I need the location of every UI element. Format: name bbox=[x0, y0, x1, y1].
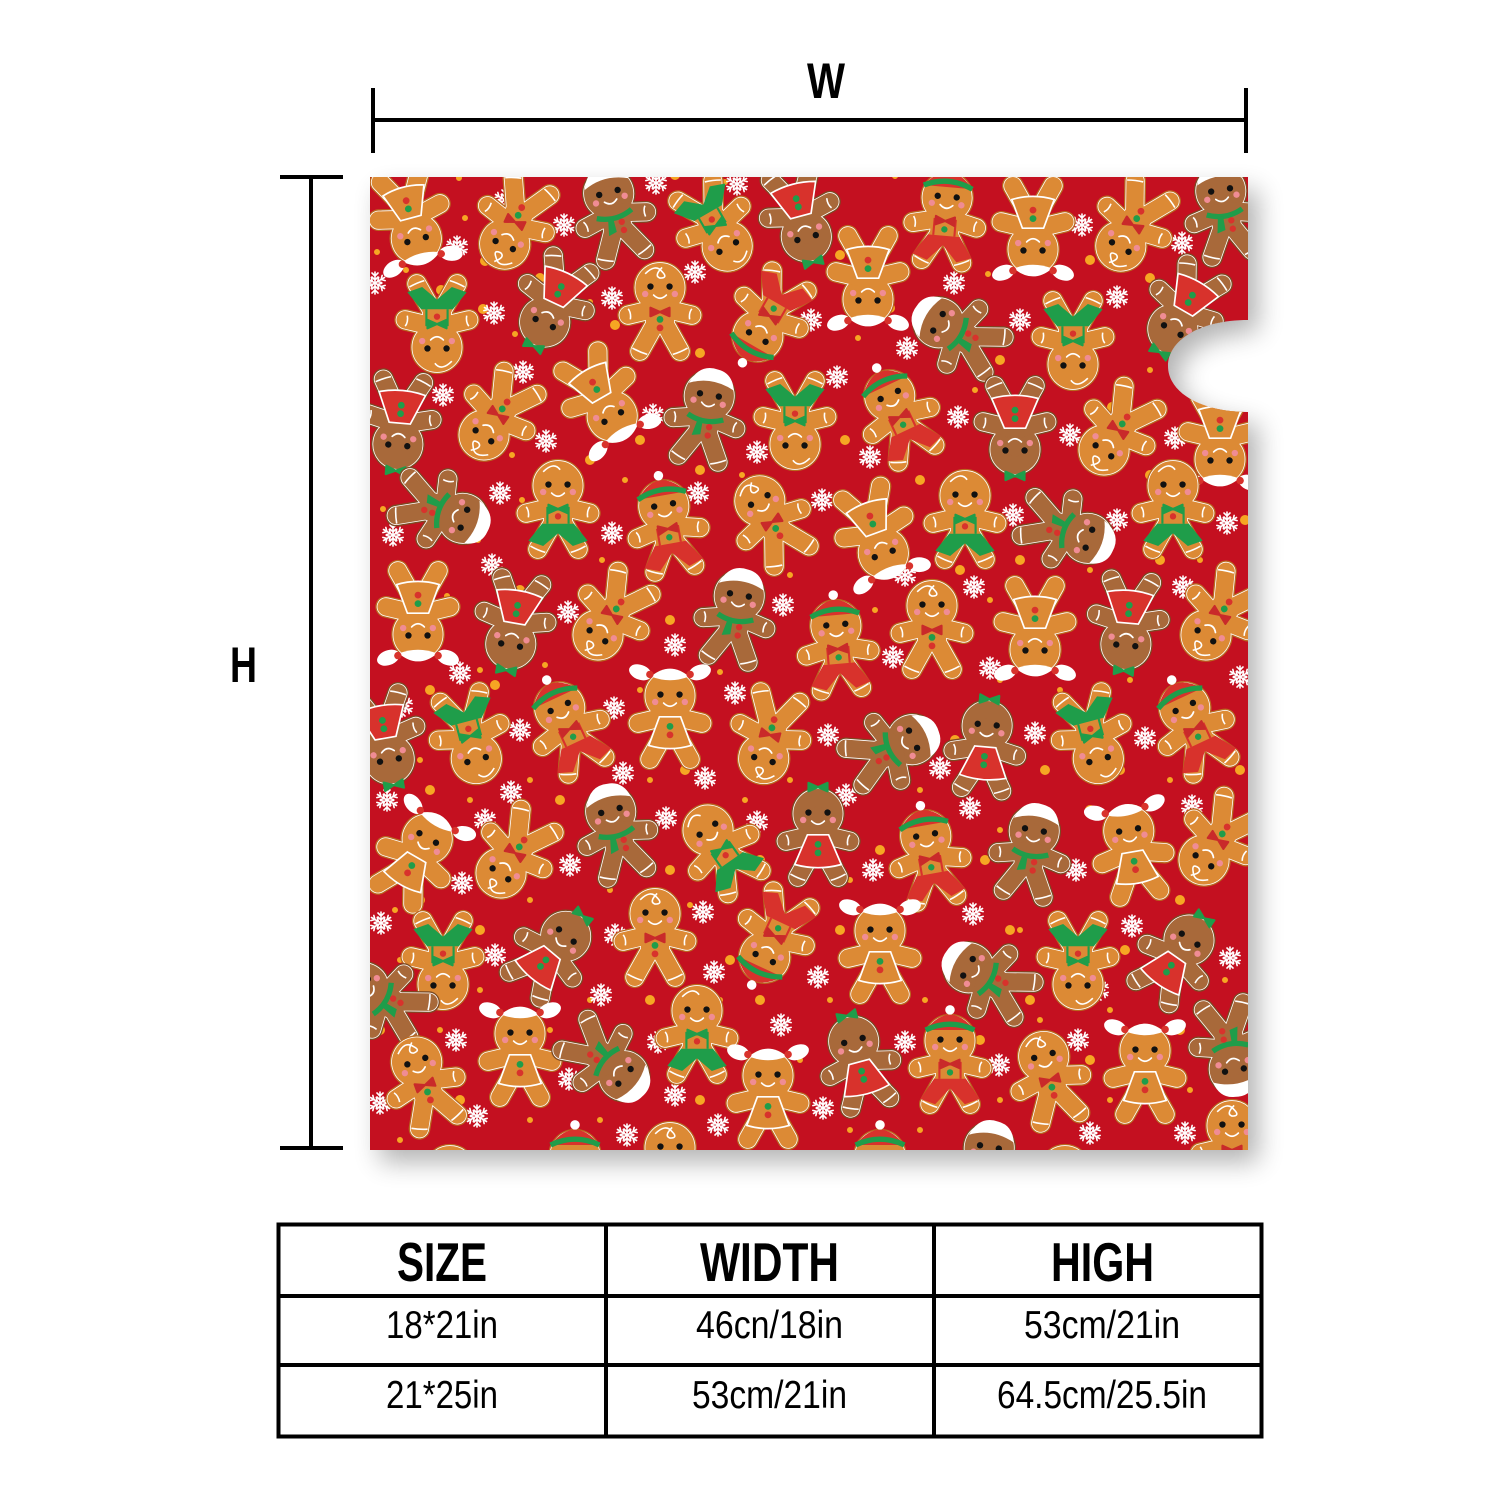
table header row: WIDTH bbox=[700, 1231, 839, 1293]
height dimension: H bbox=[230, 177, 343, 1148]
panel: red gingerbread mailbox cover bbox=[370, 177, 1248, 1150]
table row: 18*21in bbox=[386, 1304, 1180, 1347]
table row: 18*21in: 18*21in bbox=[386, 1304, 498, 1347]
size table bbox=[278, 1224, 1262, 1436]
table header row: SIZE bbox=[397, 1231, 487, 1293]
panel shadow bbox=[380, 190, 1258, 1162]
table row: 21*25in bbox=[386, 1374, 1207, 1417]
width dimension: W bbox=[373, 53, 1246, 153]
table header row: HIGH bbox=[1051, 1231, 1154, 1293]
table row: 21*25in: 21*25in bbox=[386, 1374, 498, 1417]
orange dots bbox=[377, 175, 1245, 1140]
table row: 18*21in: 53cm/21in bbox=[1024, 1304, 1180, 1347]
table row: 21*25in: 53cm/21in bbox=[692, 1374, 847, 1417]
table header row bbox=[397, 1231, 1154, 1293]
table row: 18*21in: 46cn/18in bbox=[696, 1304, 843, 1347]
table row: 21*25in: 64.5cm/25.5in bbox=[997, 1374, 1207, 1417]
width dimension: W: W bbox=[807, 53, 846, 109]
height dimension: H: H bbox=[230, 637, 257, 693]
snowflakes bbox=[364, 172, 1251, 1146]
gingerbread cookies bbox=[370, 177, 1248, 1150]
